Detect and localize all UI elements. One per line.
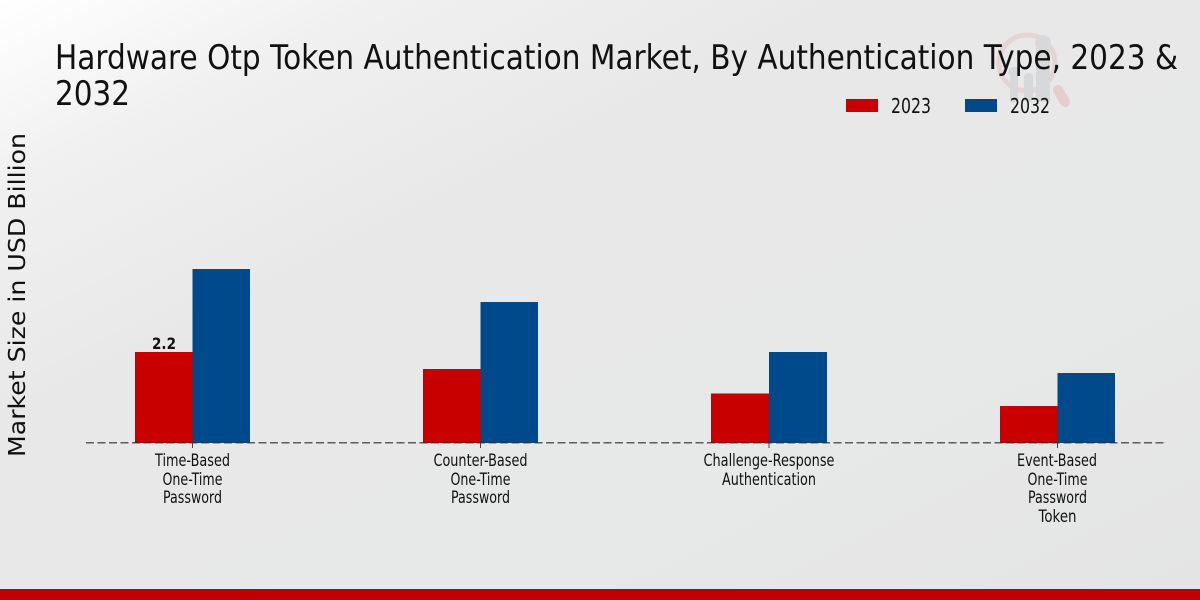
category label: Time-Based One-Time Password: Password bbox=[163, 488, 222, 507]
bars: Event-Based One-Time Password Token bbox=[1000, 373, 1115, 443]
category label: Counter-Based One-Time Password: Password bbox=[451, 488, 510, 507]
category label: Event-Based One-Time Password Token bbox=[1017, 451, 1097, 526]
category label: Counter-Based One-Time Password bbox=[434, 451, 528, 507]
category label: Challenge-Response Authentication: Challenge-Response bbox=[704, 451, 834, 470]
bars: Challenge-Response Authentication bbox=[711, 352, 827, 443]
axis baseline bbox=[86, 443, 1164, 448]
category label: Event-Based One-Time Password Token: Password bbox=[1028, 488, 1087, 507]
bar chart bbox=[86, 269, 1164, 526]
category label: Counter-Based One-Time Password: One-Time bbox=[450, 470, 510, 489]
legend swatch: 2023 bbox=[846, 99, 878, 112]
title: 2032 bbox=[55, 74, 130, 113]
category label: Event-Based One-Time Password Token: One-Time bbox=[1028, 470, 1088, 489]
value label: 2.2: 2.2 bbox=[152, 334, 176, 353]
footer bar bbox=[0, 589, 1200, 600]
category label: Event-Based One-Time Password Token: Event-Based bbox=[1017, 451, 1097, 470]
icon: watermark magnifier logo bbox=[999, 35, 1065, 102]
category label: Event-Based One-Time Password Token: Token bbox=[1038, 507, 1076, 526]
category label: Counter-Based One-Time Password: Counter-Based bbox=[434, 451, 528, 470]
bars: Counter-Based One-Time Password bbox=[423, 302, 538, 443]
category label: Time-Based One-Time Password: Time-Based bbox=[154, 451, 230, 470]
y axis title: Market Size in USD Billion bbox=[3, 133, 31, 457]
category label: Time-Based One-Time Password bbox=[154, 451, 230, 507]
category label: Challenge-Response Authentication: Authentication bbox=[722, 470, 816, 489]
bars: Time-Based One-Time Password bbox=[135, 269, 250, 443]
legend swatch: 2032 bbox=[965, 99, 997, 112]
category label: Time-Based One-Time Password: One-Time bbox=[162, 470, 222, 489]
title bbox=[55, 38, 1178, 113]
legend bbox=[846, 94, 1050, 118]
legend label: 2023: 2023 bbox=[891, 94, 931, 118]
legend label: 2032: 2032 bbox=[1010, 94, 1050, 118]
category label: Challenge-Response Authentication bbox=[704, 451, 834, 489]
